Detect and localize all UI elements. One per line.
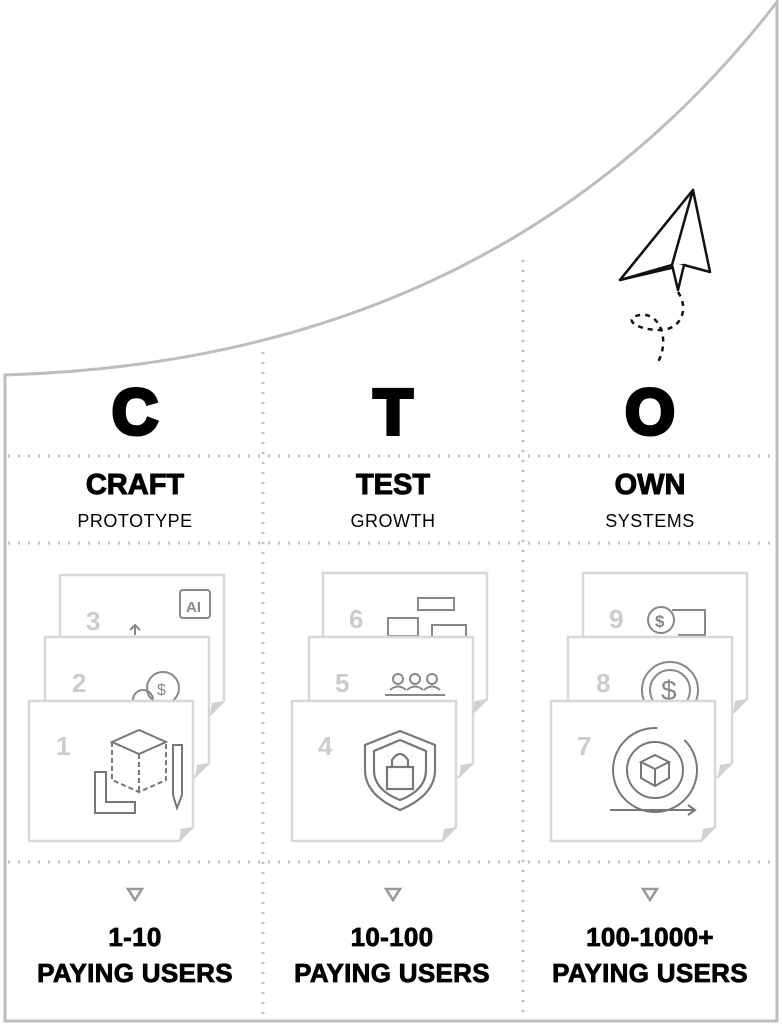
- dotted grid: [8, 260, 775, 1019]
- column letters: C: [112, 376, 158, 448]
- cards column 2: 6: [349, 604, 363, 634]
- paying users: PAYING USERS: [294, 958, 490, 988]
- column letters: [112, 376, 675, 448]
- column headings: CRAFT: [86, 469, 184, 501]
- cards column 1: AI: [186, 599, 201, 616]
- cards column 3: 8: [596, 668, 610, 698]
- cards column 1: 3: [86, 606, 100, 636]
- column headings: GROWTH: [351, 511, 435, 531]
- column headings: [77, 469, 695, 531]
- cards column 2: 4: [318, 731, 333, 761]
- cards column 3: 9: [609, 604, 623, 634]
- cards column 1: 1: [56, 731, 70, 761]
- cards column 1: $: [157, 682, 166, 699]
- paying users: [37, 922, 748, 988]
- cards column 3: $: [661, 675, 677, 706]
- column headings: TEST: [356, 469, 430, 501]
- cards column 2: [292, 573, 487, 841]
- arrows: [128, 889, 657, 900]
- paying users: PAYING USERS: [37, 958, 233, 988]
- cards column 3: $: [655, 612, 665, 631]
- column letters: O: [625, 376, 675, 448]
- cards column 1: [29, 575, 224, 841]
- column headings: PROTOTYPE: [77, 511, 193, 531]
- column headings: OWN: [615, 469, 685, 501]
- cards column 1: 2: [72, 668, 86, 698]
- paying users: 1-10: [108, 922, 162, 952]
- cards column 3: [551, 573, 747, 841]
- paying users: PAYING USERS: [552, 958, 748, 988]
- paying users: 100-1000+: [586, 922, 714, 952]
- column letters: T: [373, 376, 413, 448]
- cards column 2: 5: [335, 668, 349, 698]
- paying users: 10-100: [351, 922, 433, 952]
- column headings: SYSTEMS: [605, 511, 695, 531]
- icon: paper plane: [620, 190, 710, 362]
- cards column 3: 7: [577, 731, 591, 761]
